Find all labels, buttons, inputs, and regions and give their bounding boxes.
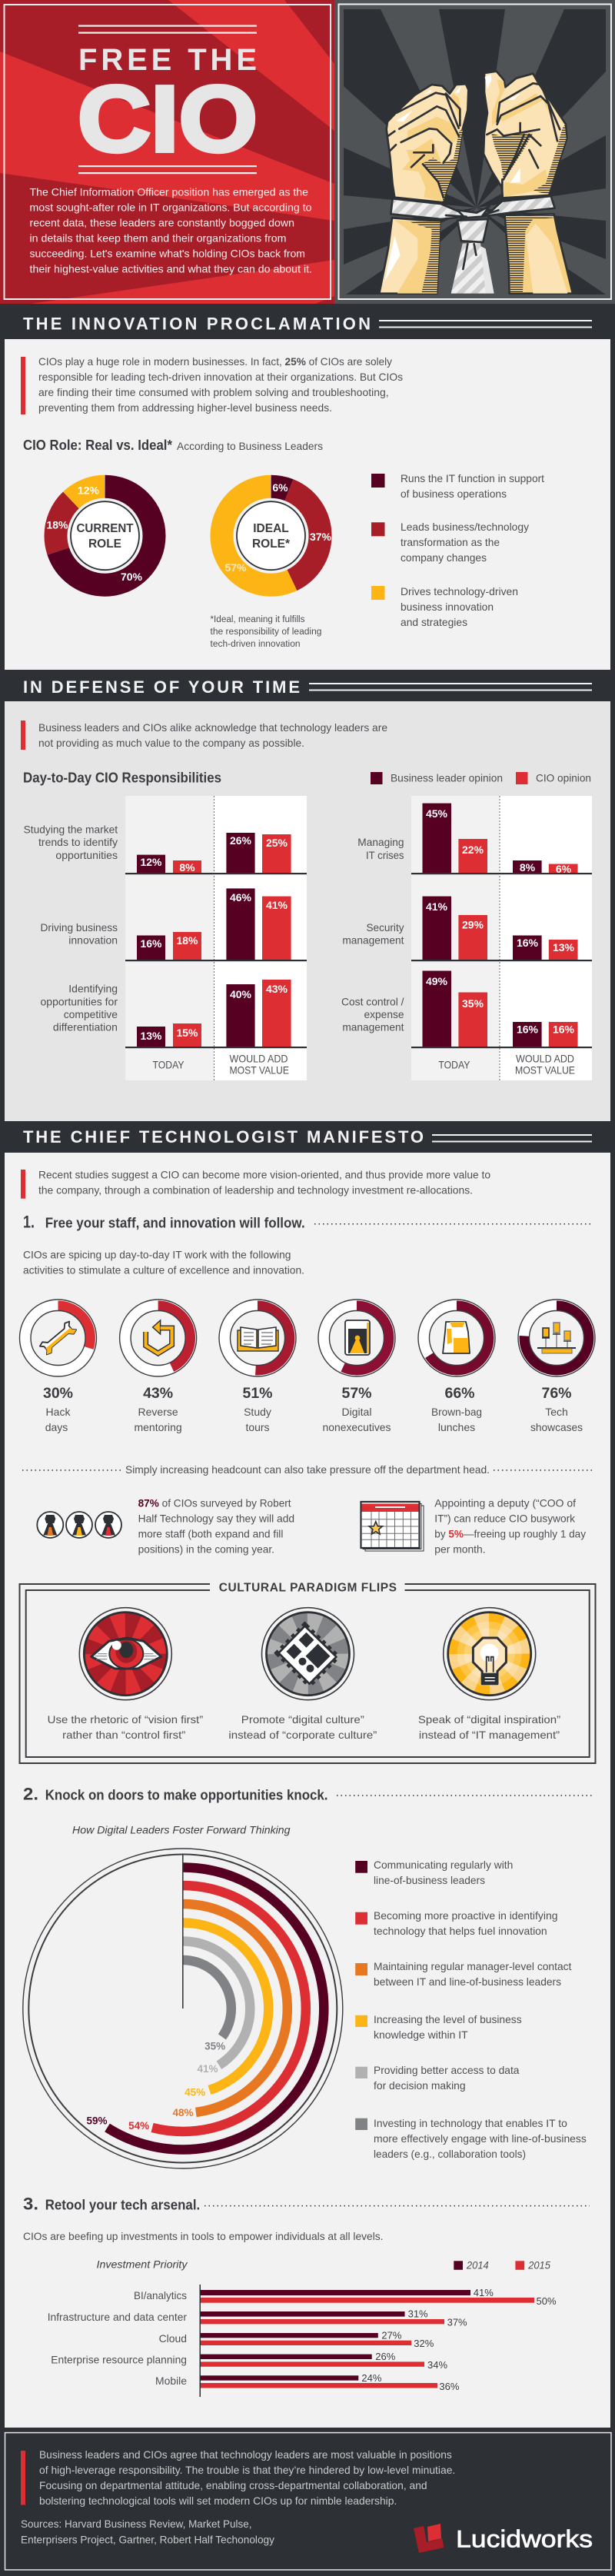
legend: opinions: CIO opinion <box>536 772 591 784</box>
bar chart: left column: differentiation <box>53 1021 118 1033</box>
legend: CIO role: of business operations <box>401 488 507 500</box>
bar chart: right column: 29% <box>462 918 484 930</box>
donut: current role: ROLE <box>88 537 121 551</box>
intro text: not providing as much value to the company as possible. <box>38 737 304 749</box>
legend: years: 2014 <box>466 2259 489 2271</box>
legend: digital leaders: Investing in technology that enables IT to <box>374 2117 567 2129</box>
bar chart: right column: 41% <box>426 900 448 913</box>
bar chart: investment priority: Infrastructure and data center <box>48 2311 187 2323</box>
bar chart: right column: 49% <box>426 975 448 987</box>
text: spicing up day-to-day work <box>23 1249 304 1276</box>
bar chart: investment priority: 24% <box>361 2372 382 2384</box>
divider text: headcount: Simply increasing headcount can also take pressure off the department head. <box>125 1463 490 1476</box>
icon: devices on display table <box>537 1323 576 1353</box>
progress ring: tech showcases <box>518 1300 595 1433</box>
bar chart: left column: innovation <box>68 934 118 946</box>
bar chart: right column: management <box>342 1021 404 1033</box>
text: spicing up day-to-day work: CIOs are spicing up day-to-day IT work with the following <box>23 1249 291 1261</box>
legend: digital leaders: leaders (e.g., collaboration tools) <box>374 2148 526 2160</box>
hero introduction text <box>29 186 312 275</box>
title: CIO <box>78 66 258 171</box>
legend: years <box>454 2259 550 2271</box>
legend: digital leaders <box>355 1859 587 2160</box>
bar chart: left column: 13% <box>140 1030 162 1042</box>
radial bar chart: 54% <box>128 2120 149 2132</box>
intro text <box>38 721 387 749</box>
heading: step 3 <box>23 2194 590 2213</box>
progress ring: digital nonexecutives: 57% <box>341 1385 372 1402</box>
progress ring: digital nonexecutives: Digital <box>342 1406 371 1418</box>
heading: step 2: 2. <box>23 1785 38 1804</box>
progress ring: study tours: Study <box>244 1406 271 1418</box>
bar chart: left column: Identifying <box>68 983 118 995</box>
panel: innovation proclamation <box>5 339 610 670</box>
progress ring: brown-bag lunches: 66% <box>444 1385 475 1402</box>
intro text: CIOs play a huge role in modern businesses. In fact, 25% of CIOs are solely <box>38 355 392 368</box>
legend: digital leaders: Communicating regularly with <box>374 1859 513 1871</box>
bar chart: right column: 35% <box>462 997 484 1010</box>
legend: digital leaders: technology that helps fuel innovation <box>374 1925 547 1937</box>
bar chart: investment priority: 37% <box>447 2316 467 2328</box>
conclusion text: Focusing on departmental attitude, enabling cross-departmental collaboration, and <box>39 2479 427 2491</box>
heading: step 1 <box>23 1213 593 1232</box>
legend: CIO role: Leads business/technology <box>401 521 529 533</box>
bar chart: left column: 41% <box>266 899 288 911</box>
section heading: the chief technologist manifesto: THE CHIEF TECHNOLOGIST MANIFESTO <box>23 1127 424 1147</box>
legend: CIO role <box>371 472 544 628</box>
chart title: Investment Priority <box>97 2259 188 2270</box>
bar chart: left column: 46% <box>230 891 252 904</box>
bar chart: right column: 22% <box>462 844 484 856</box>
captions: Use the rhetoric of “vision first” <box>48 1713 204 1726</box>
chart heading <box>23 438 323 453</box>
bar chart: right column: TODAY <box>438 1058 470 1070</box>
footnote: *Ideal, meaning it fulfills <box>211 615 305 624</box>
progress ring: reverse mentoring: Reverse <box>138 1406 178 1418</box>
radial bar chart: 59% <box>86 2115 108 2127</box>
captions: Speak of “digital inspiration” <box>418 1713 560 1726</box>
text: 87 percent add staff <box>138 1496 294 1555</box>
section heading: the innovation proclamation: THE INNOVATION PROCLAMATION <box>23 314 371 334</box>
donut: current role: 18% <box>46 518 68 531</box>
bar chart: right column: 16% <box>517 937 539 949</box>
bar chart: investment priority: 41% <box>474 2287 494 2298</box>
legend: digital leaders: line-of-business leaders <box>374 1874 485 1886</box>
radial bar chart <box>23 1849 343 2168</box>
bar chart: right column: management <box>342 934 404 946</box>
bar chart: left column: 18% <box>176 934 198 947</box>
panel: chief technologist manifesto <box>5 1153 610 2428</box>
hero introduction text: recent data, these leaders are constantly bogged down <box>29 217 294 229</box>
hero introduction text: succeeding. Let's examine what's holding CIOs back from <box>29 248 305 260</box>
text: appoint a deputy: per month. <box>434 1543 486 1555</box>
donut: ideal role: 6% <box>272 481 288 494</box>
progress ring: study tours: 51% <box>242 1385 273 1402</box>
bar chart: left column: TODAY <box>152 1058 184 1070</box>
radial bar chart: 45% <box>184 2087 205 2098</box>
legend: CIO role: Drives technology-driven <box>401 585 518 597</box>
progress ring: brown-bag lunches <box>418 1300 495 1433</box>
bar chart: left column: 15% <box>176 1027 198 1039</box>
legend: CIO role: transformation as the <box>401 536 500 548</box>
bar chart: left column: 8% <box>179 861 195 874</box>
radial bar chart: 48% <box>172 2107 194 2118</box>
panel: tied hands illustration <box>334 0 615 304</box>
donut: current role: 12% <box>78 484 100 497</box>
bar chart: investment priority: 31% <box>408 2308 428 2319</box>
bar chart: right column: Cost control / <box>341 995 404 1007</box>
logo: Lucidworks <box>414 2524 593 2553</box>
progress ring: brown-bag lunches: Brown-bag <box>431 1406 482 1418</box>
conclusion text: of high-leverage responsibility. The trouble is that they’re hindered by low-level minutiae. <box>39 2464 455 2476</box>
progress ring: reverse mentoring <box>120 1300 197 1433</box>
bar chart: left column: opportunities <box>55 849 118 861</box>
bar chart: investment priority: Mobile <box>155 2375 187 2387</box>
icon: three staff members <box>37 1512 121 1538</box>
progress ring: tech showcases: 76% <box>541 1385 572 1402</box>
bar chart: right column: IT crises <box>366 849 404 861</box>
legend: digital leaders: Providing better access to data <box>374 2064 520 2076</box>
legend: CIO role: company changes <box>401 551 487 564</box>
bar chart: left column: 40% <box>230 988 252 1000</box>
bar chart: left column: trends to identify <box>38 836 118 848</box>
text: 87 percent add staff: Half Technology say they will add <box>138 1512 294 1524</box>
text: beefing up investments: CIOs are beefing up investments in tools to empower individuals at all levels. <box>23 2230 383 2242</box>
icon: open book <box>238 1327 278 1351</box>
section heading: in defense of your time: IN DEFENSE OF YOUR TIME <box>23 677 300 697</box>
progress ring: hack days: Hack <box>46 1406 71 1418</box>
legend: years: 2015 <box>527 2259 550 2271</box>
conclusion text: bolstering technological tools will set modern CIOs up for nimble leadership. <box>39 2494 397 2507</box>
captions <box>48 1713 560 1741</box>
progress ring: reverse mentoring: 43% <box>143 1385 173 1402</box>
text: appoint a deputy: Appointing a deputy (“COO of <box>434 1496 576 1509</box>
heading: CULTURAL PARADIGM FLIPS <box>219 1581 397 1595</box>
text: appoint a deputy: IT”) can reduce CIO busywork <box>434 1512 576 1524</box>
heading: step 1: Free your staff, and innovation will follow. <box>45 1216 305 1231</box>
legend: digital leaders: for decision making <box>374 2079 466 2092</box>
badge: eye <box>79 1608 171 1700</box>
bar chart: right column: 16% <box>553 1023 575 1036</box>
intro text <box>38 355 403 414</box>
icon: tablet with person <box>345 1320 370 1355</box>
hero introduction text: their highest-value activities and what they can do about it. <box>29 263 312 275</box>
legend: digital leaders: Maintaining regular manager-level contact <box>374 1960 572 1972</box>
sources: Enterprisers Project, Gartner, Robert Half Techonology <box>21 2533 274 2545</box>
progress ring: reverse mentoring: mentoring <box>134 1421 182 1433</box>
bar chart: left column: 26% <box>230 834 252 847</box>
intro text: Business leaders and CIOs alike acknowledge that technology leaders are <box>38 721 387 734</box>
intro text: Recent studies suggest a CIO can become more vision-oriented, and thus provide more value to <box>38 1169 490 1181</box>
progress ring: hack days <box>20 1300 97 1433</box>
legend: digital leaders: between IT and line-of-business leaders <box>374 1975 561 1988</box>
intro text <box>38 1169 490 1196</box>
bar chart: right column: 8% <box>520 861 536 874</box>
legend: CIO role: business innovation <box>401 601 494 613</box>
legend: CIO role: Runs the IT function in support <box>401 472 544 484</box>
progress ring: study tours <box>219 1300 296 1433</box>
bar chart: right column <box>341 796 592 1080</box>
footnote <box>211 615 321 649</box>
text: 87 percent add staff: positions) in the coming year. <box>138 1543 274 1555</box>
progress ring: tech showcases: showcases <box>530 1421 583 1433</box>
donut: current role <box>46 484 154 585</box>
donut: ideal role: ROLE* <box>252 537 291 551</box>
legend: digital leaders: knowledge within IT <box>374 2029 468 2041</box>
legend: opinions: Business leader opinion <box>391 772 503 784</box>
chart heading: Day-to-Day CIO Responsibilities <box>23 770 221 786</box>
heading: step 3: 3. <box>23 2194 38 2213</box>
bar chart: left column: 16% <box>140 937 162 950</box>
bar chart: right column: Security <box>366 921 404 934</box>
donut: ideal role <box>221 481 332 585</box>
bar chart: investment priority: BI/analytics <box>134 2289 187 2301</box>
progress ring: digital nonexecutives <box>318 1300 395 1433</box>
bar chart: right column: 6% <box>556 863 572 875</box>
donut: ideal role: 37% <box>310 531 332 543</box>
intro text: responsible for leading tech-driven innovation at their organizations. But CIOs <box>38 371 403 383</box>
intro text: are finding their time consumed with problem solving and troubleshooting, <box>38 386 389 398</box>
bar chart: investment priority: 27% <box>381 2330 402 2341</box>
conclusion text: Business leaders and CIOs agree that technology leaders are most valuable in positions <box>39 2448 452 2461</box>
bar chart: investment priority: 34% <box>427 2359 447 2371</box>
bar chart: investment priority: Cloud <box>159 2332 187 2345</box>
text: appoint a deputy: by 5%—freeing up roughly 1 day <box>434 1527 586 1539</box>
chart heading: CIO Role: Real vs. Ideal* <box>23 438 172 453</box>
hero introduction text: The Chief Information Officer position has emerged as the <box>29 186 308 198</box>
intro text: preventing them from addressing higher-level business needs. <box>38 401 332 414</box>
title: FREE THE <box>78 43 257 77</box>
heading: step 2 <box>23 1785 592 1804</box>
icon: lunch bag <box>443 1322 470 1353</box>
bar chart: right column: WOULD ADD <box>516 1052 574 1064</box>
bar chart: right column: 13% <box>553 941 575 954</box>
heading: step 3: Retool your tech arsenal. <box>45 2197 200 2212</box>
chart heading: According to Business Leaders <box>177 440 323 452</box>
bar chart: left column: Studying the market <box>24 823 118 835</box>
captions: instead of “IT management” <box>419 1729 560 1741</box>
icon: calendar with star <box>361 1502 424 1551</box>
text: spicing up day-to-day work: activities to stimulate a culture of excellence and innovation. <box>23 1264 304 1276</box>
sources: Sources: Harvard Business Review, Market Pulse, <box>21 2518 252 2530</box>
icon: reverse arrow <box>146 1320 172 1353</box>
bar chart: left column <box>24 796 307 1080</box>
bar chart: left column: 25% <box>266 837 288 849</box>
progress ring: hack days: 30% <box>43 1385 73 1402</box>
legend: opinions <box>371 772 591 784</box>
icon: wrench <box>39 1320 77 1356</box>
panel: conclusion footer <box>5 2433 611 2570</box>
progress ring: hack days: days <box>45 1421 68 1433</box>
bar chart: left column: MOST VALUE <box>229 1064 289 1077</box>
footnote: tech-driven innovation <box>211 640 300 649</box>
radial bar chart: 35% <box>204 2041 225 2052</box>
bar chart: left column: WOULD ADD <box>229 1052 288 1064</box>
bar chart: investment priority: 32% <box>414 2338 434 2349</box>
bar chart: investment priority: 26% <box>375 2351 396 2362</box>
donut: ideal role: IDEAL <box>253 522 289 535</box>
chart title: How Digital Leaders Foster Forward Thinking <box>72 1824 291 1836</box>
logo: Lucidworks: Lucidworks <box>456 2525 593 2553</box>
badge: light bulb <box>444 1608 536 1700</box>
bar chart: left column: competitive <box>64 1008 118 1020</box>
bar chart: investment priority: Enterprise resource planning <box>51 2353 187 2365</box>
bar chart: right column: Managing <box>357 836 404 848</box>
captions: Promote “digital culture” <box>241 1713 364 1726</box>
hero introduction text: most sought-after role in IT organizations. But according to <box>29 201 312 214</box>
donut: current role: 70% <box>121 571 143 583</box>
donut: current role: CURRENT <box>77 522 134 535</box>
heading: step 1: 1. <box>23 1213 35 1232</box>
text: 87 percent add staff: 87% of CIOs surveyed by Robert <box>138 1496 291 1509</box>
bar chart: investment priority <box>48 2285 557 2397</box>
legend: digital leaders: Increasing the level of business <box>374 2013 522 2025</box>
intro text: the company, through a combination of leadership and technology investment re-allocations. <box>38 1184 473 1196</box>
progress ring: digital nonexecutives: nonexecutives <box>323 1421 391 1433</box>
progress ring: tech showcases: Tech <box>545 1406 568 1418</box>
captions: rather than “control first” <box>62 1729 186 1741</box>
bar chart: right column: 45% <box>426 807 448 820</box>
bar chart: left column: 12% <box>140 856 162 868</box>
captions: instead of “corporate culture” <box>228 1729 377 1741</box>
hero introduction text: in details that keep them and their organizations from <box>29 232 286 245</box>
heading: step 2: Knock on doors to make opportunities knock. <box>45 1788 327 1803</box>
footnote: the responsibility of leading <box>211 627 321 637</box>
panel: cultural paradigm flips <box>20 1578 595 1763</box>
progress ring: study tours: tours <box>245 1421 270 1433</box>
bar chart: left column: opportunities for <box>40 995 118 1007</box>
legend: CIO role: and strategies <box>401 616 467 628</box>
donut: ideal role: 57% <box>224 561 247 574</box>
progress ring: brown-bag lunches: lunches <box>438 1421 475 1433</box>
bar chart: left column: 43% <box>266 983 288 995</box>
icon: hands bound with a necktie <box>379 72 573 294</box>
sources <box>21 2518 274 2545</box>
conclusion text <box>39 2448 455 2507</box>
panel: in defense of your time <box>5 701 610 1121</box>
text: appoint a deputy <box>434 1496 586 1555</box>
bar chart: right column: MOST VALUE <box>515 1064 575 1077</box>
legend: digital leaders: Becoming more proactive in identifying <box>374 1909 558 1922</box>
radial bar chart: 41% <box>197 2063 218 2075</box>
bar chart: investment priority: 50% <box>537 2295 557 2307</box>
legend: digital leaders: more effectively engage with line-of-business <box>374 2132 587 2145</box>
bar chart: right column: expense <box>364 1008 404 1020</box>
panel: hero title <box>0 0 334 304</box>
bar chart: left column: Driving business <box>40 921 118 934</box>
text: 87 percent add staff: more staff (both expand and fill <box>138 1527 283 1539</box>
bar chart: right column: 16% <box>517 1023 539 1036</box>
bar chart: investment priority: 36% <box>439 2381 460 2392</box>
badge: chip <box>261 1608 354 1700</box>
